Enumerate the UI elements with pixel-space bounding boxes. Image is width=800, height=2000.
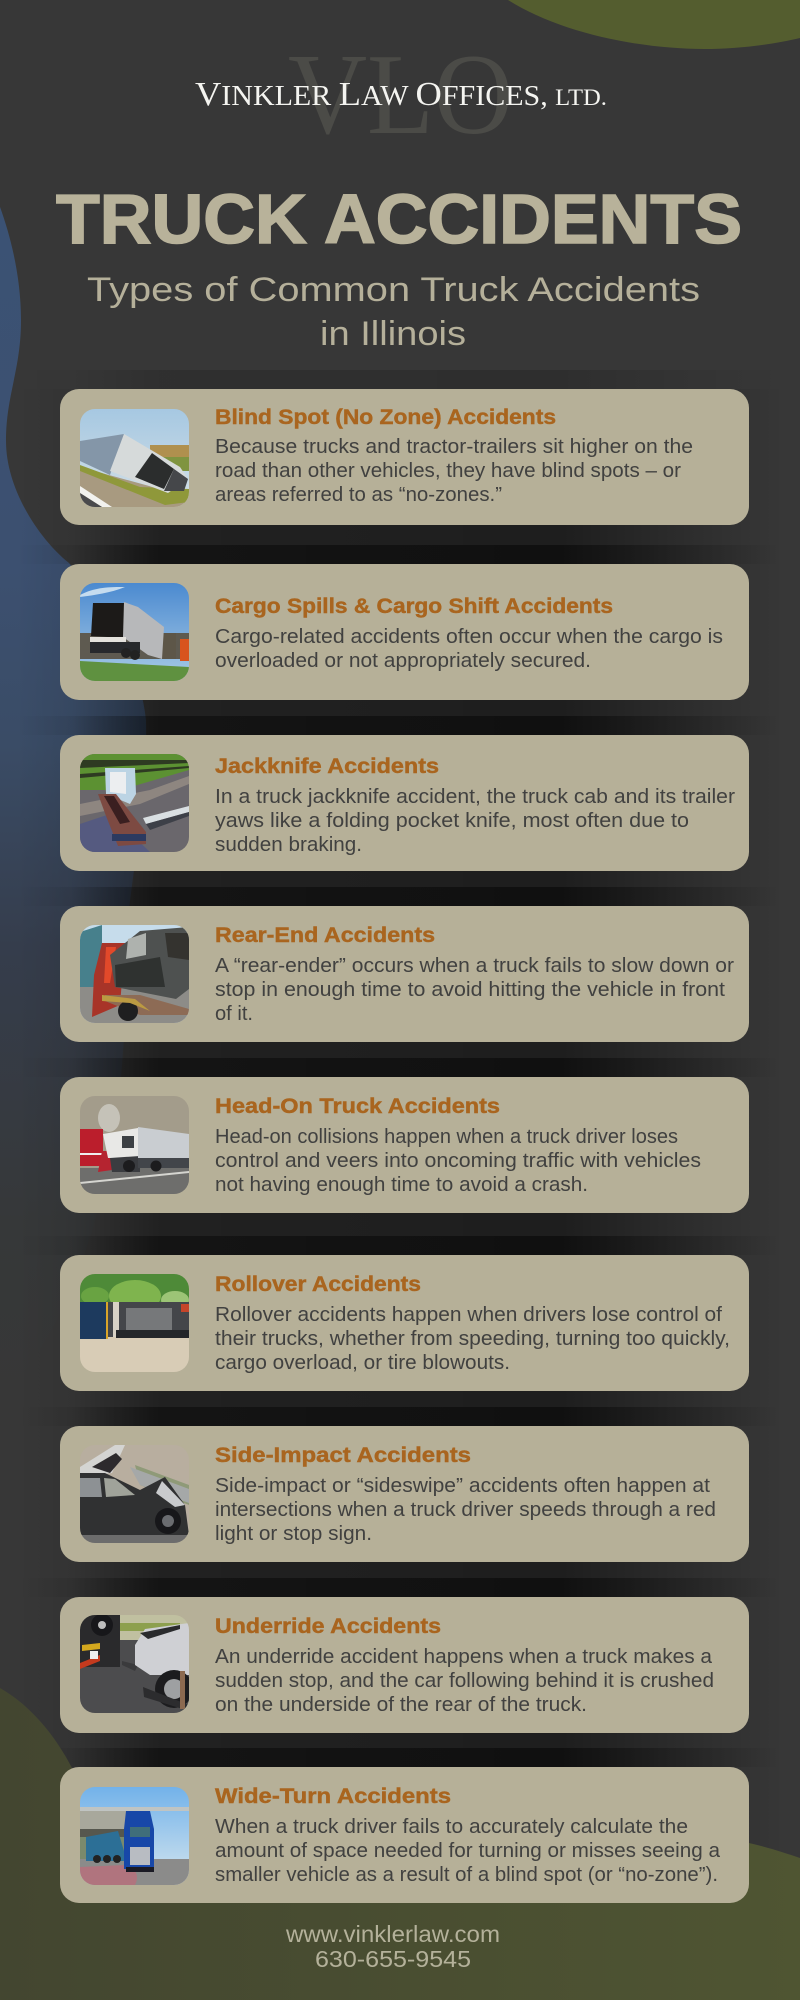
photo: wrecked car on tow truck [80,925,189,1023]
heading: Head-On Truck Accidents [215,1095,500,1118]
photo: overturned truck in ditch [80,409,189,507]
body text: road than other vehicles, they have blind spots – or [215,460,681,482]
body text: light or stop sign. [215,1523,372,1545]
body text: Because trucks and tractor-trailers sit higher on the [215,436,693,458]
body text: Head-on collisions happen when a truck driver loses [215,1126,678,1148]
title: TRUCK ACCIDENTS [56,180,742,258]
body text: cargo overload, or tire blowouts. [215,1352,510,1374]
card shadows [0,370,800,1868]
body text: their trucks, whether from speeding, turning too quickly, [215,1328,730,1350]
panel: side-impact accidents [60,1426,749,1562]
photo: blue truck and tow truck [80,1787,189,1885]
heading: Cargo Spills & Cargo Shift Accidents [215,595,613,618]
body text [215,786,735,856]
body text: overloaded or not appropriately secured. [215,650,591,672]
panel: rear-end accidents [60,906,749,1042]
body text: In a truck jackknife accident, the truck cab and its trailer [215,786,735,808]
body text: intersections when a truck driver speeds through a red [215,1499,716,1521]
body text: Side-impact or “sideswipe” accidents often happen at [215,1475,710,1497]
logo: faint VLO monogram: VLO [288,31,513,159]
body text: sudden braking. [215,834,362,856]
panel: jackknife accidents [60,735,749,871]
body text: amount of space needed for turning or misses seeing a [215,1840,721,1862]
photo: head-on collision of trucks [80,1096,189,1194]
panel: wide-turn accidents [60,1767,749,1903]
body text [215,436,693,506]
footer: website and phone: 630-655-9545 [315,1946,471,1972]
body text [215,1816,721,1886]
subtitle: in Illinois [320,315,466,353]
panel: blind spot accidents [60,389,749,525]
body text: Rollover accidents happen when drivers lose control of [215,1304,722,1326]
body text: sudden stop, and the car following behind it is crushed [215,1670,714,1692]
body text: smaller vehicle as a result of a blind spot (or “no-zone”). [215,1864,718,1886]
photo: damaged dark car [80,1445,189,1543]
body text: yaws like a folding pocket knife, most often due to [215,810,689,832]
panel: head-on truck accidents [60,1077,749,1213]
heading: Side-Impact Accidents [215,1444,471,1467]
footer: website and phone: www.vinklerlaw.com [285,1921,500,1947]
footer: website and phone [285,1921,500,1972]
body text [215,1475,716,1545]
body text: not having enough time to avoid a crash. [215,1174,588,1196]
body text [215,1126,701,1196]
body text: control and veers into oncoming traffic with vehicles [215,1150,701,1172]
body text: of it. [215,1003,253,1025]
body text [215,1646,714,1716]
body text: stop in enough time to avoid hitting the vehicle in front [215,979,725,1001]
heading: Wide-Turn Accidents [215,1785,451,1808]
body text: An underride accident happens when a truck makes a [215,1646,713,1668]
panel: cargo spills [60,564,749,700]
heading: Jackknife Accidents [215,755,439,778]
heading: Rear-End Accidents [215,924,435,947]
panel: underride accidents [60,1597,749,1733]
logo: firm name: VINKLER LAW OFFICES, LTD. [195,76,607,113]
blue background blob [0,207,146,1400]
photo: jackknifed truck [80,754,189,852]
photo: spilled cargo trailer [80,583,189,681]
subtitle: Types of Common Truck Accidents [87,271,700,309]
green blob bottom [0,1688,800,2000]
heading: Underride Accidents [215,1615,441,1638]
heading: Blind Spot (No Zone) Accidents [215,406,556,429]
body text: When a truck driver fails to accurately calculate the [215,1816,688,1838]
body text: Cargo-related accidents often occur when the cargo is [215,626,723,648]
subtitle [87,271,700,353]
body text: on the underside of the rear of the truck. [215,1694,587,1716]
green blob top right [508,0,800,49]
photo: truck on its side [80,1274,189,1372]
body text [215,1304,730,1374]
photo: car behind tow truck [80,1614,193,1713]
body text [215,955,734,1025]
body text: areas referred to as “no-zones.” [215,484,502,506]
heading: Rollover Accidents [215,1273,421,1296]
body text [215,626,723,672]
body text: A “rear-ender” occurs when a truck fails to slow down or [215,955,734,977]
panel: rollover accidents [60,1255,749,1391]
